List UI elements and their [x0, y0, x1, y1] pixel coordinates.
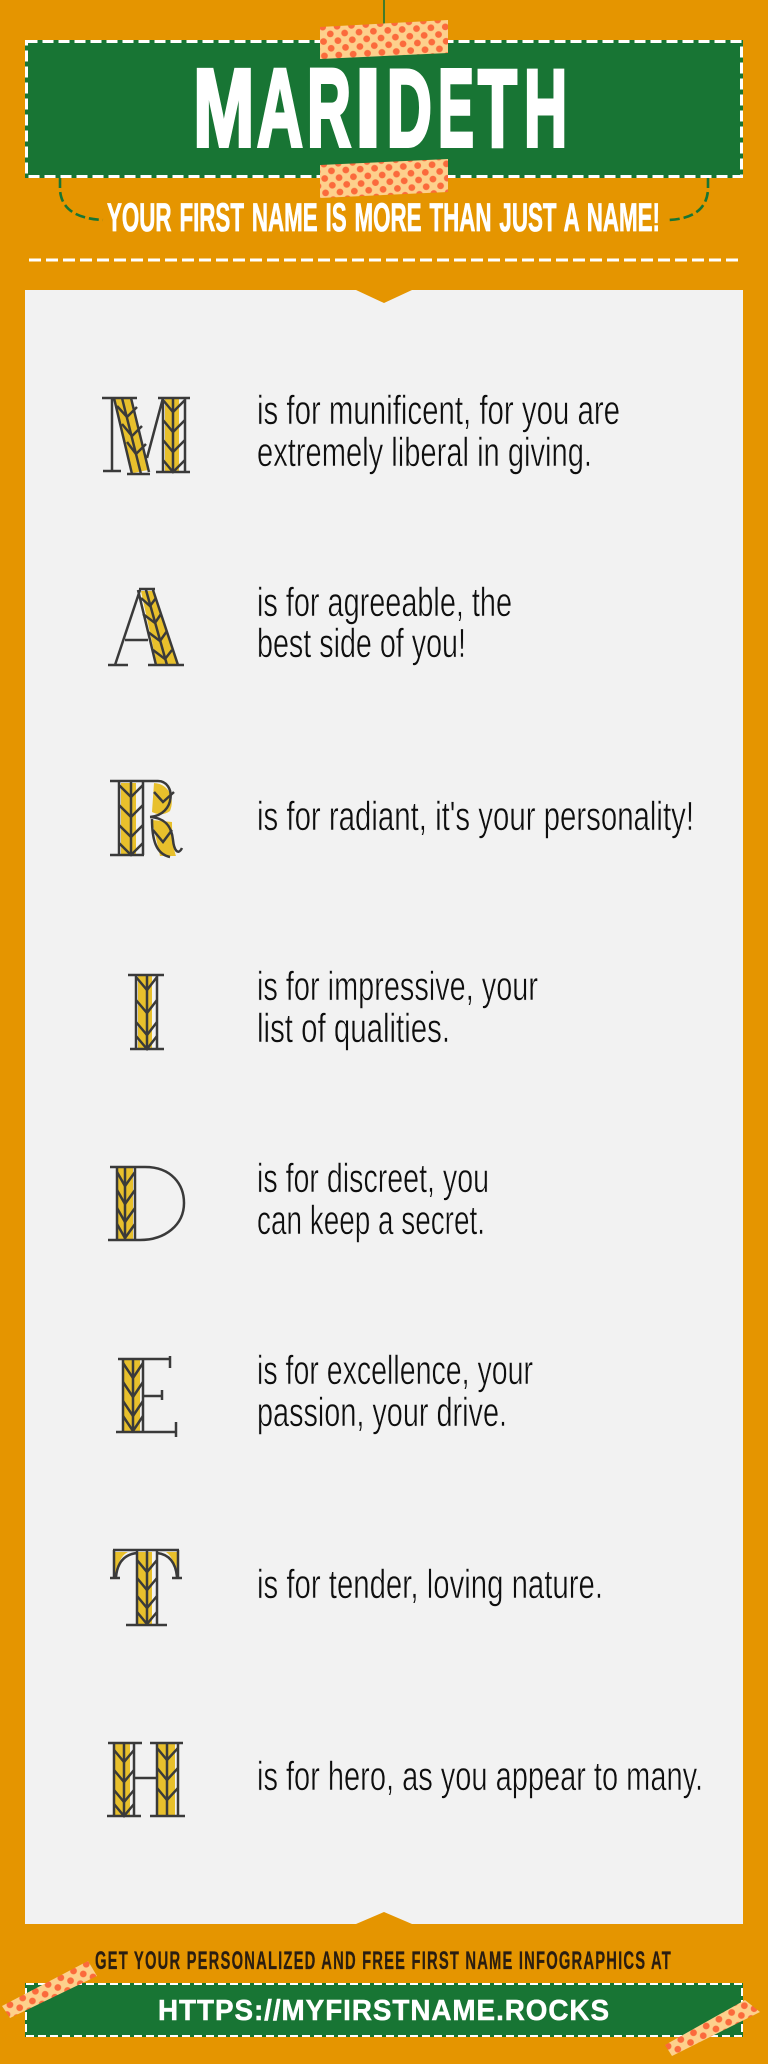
- letter E: [116, 1356, 176, 1437]
- hanging line: [383, 0, 385, 24]
- footer banner: [25, 1983, 743, 2037]
- text A: is for agreeable, the: [257, 579, 512, 625]
- letter R: [110, 781, 182, 857]
- left curved dashed connector: [60, 178, 103, 220]
- text M: is for munificent, for you are: [257, 387, 620, 433]
- title: M: [193, 46, 254, 170]
- title: H: [524, 47, 567, 170]
- letter D: [108, 1167, 184, 1240]
- text D: can keep a secret.: [257, 1197, 485, 1243]
- text A: best side of you!: [257, 620, 466, 666]
- text M: [257, 387, 620, 475]
- footer url: HTTPS://MYFIRSTNAME.ROCKS: [158, 1995, 610, 2027]
- title: D: [387, 46, 432, 169]
- footer right tape: [665, 2000, 760, 2056]
- text D: [257, 1155, 489, 1243]
- text D: is for discreet, you: [257, 1155, 489, 1201]
- text A: [257, 579, 512, 666]
- text I: [257, 963, 538, 1051]
- letter T: [110, 1550, 182, 1625]
- top tape: [320, 20, 448, 59]
- text I: is for impressive, your: [257, 963, 538, 1009]
- bottom tape: [320, 159, 448, 198]
- letter H: [107, 1743, 185, 1816]
- title: T: [478, 48, 517, 170]
- letter I: [128, 975, 164, 1049]
- title: A: [257, 48, 303, 170]
- main panel: [25, 290, 743, 1924]
- dashed divider: [29, 258, 738, 262]
- footer left tape: [2, 1961, 97, 2018]
- right curved dashed connector: [669, 178, 708, 220]
- title: R: [307, 47, 351, 170]
- text E: passion, your drive.: [257, 1389, 507, 1435]
- text E: is for excellence, your: [257, 1347, 533, 1393]
- title: [193, 46, 567, 170]
- letter A: [108, 589, 184, 665]
- header banner: [25, 40, 743, 178]
- text I: list of qualities.: [257, 1005, 450, 1051]
- title: I: [355, 47, 381, 170]
- title: E: [438, 48, 474, 170]
- text E: [257, 1347, 533, 1435]
- text M: extremely liberal in giving.: [257, 429, 592, 475]
- text T: is for tender, loving nature.: [257, 1561, 603, 1607]
- letter M: [102, 398, 190, 474]
